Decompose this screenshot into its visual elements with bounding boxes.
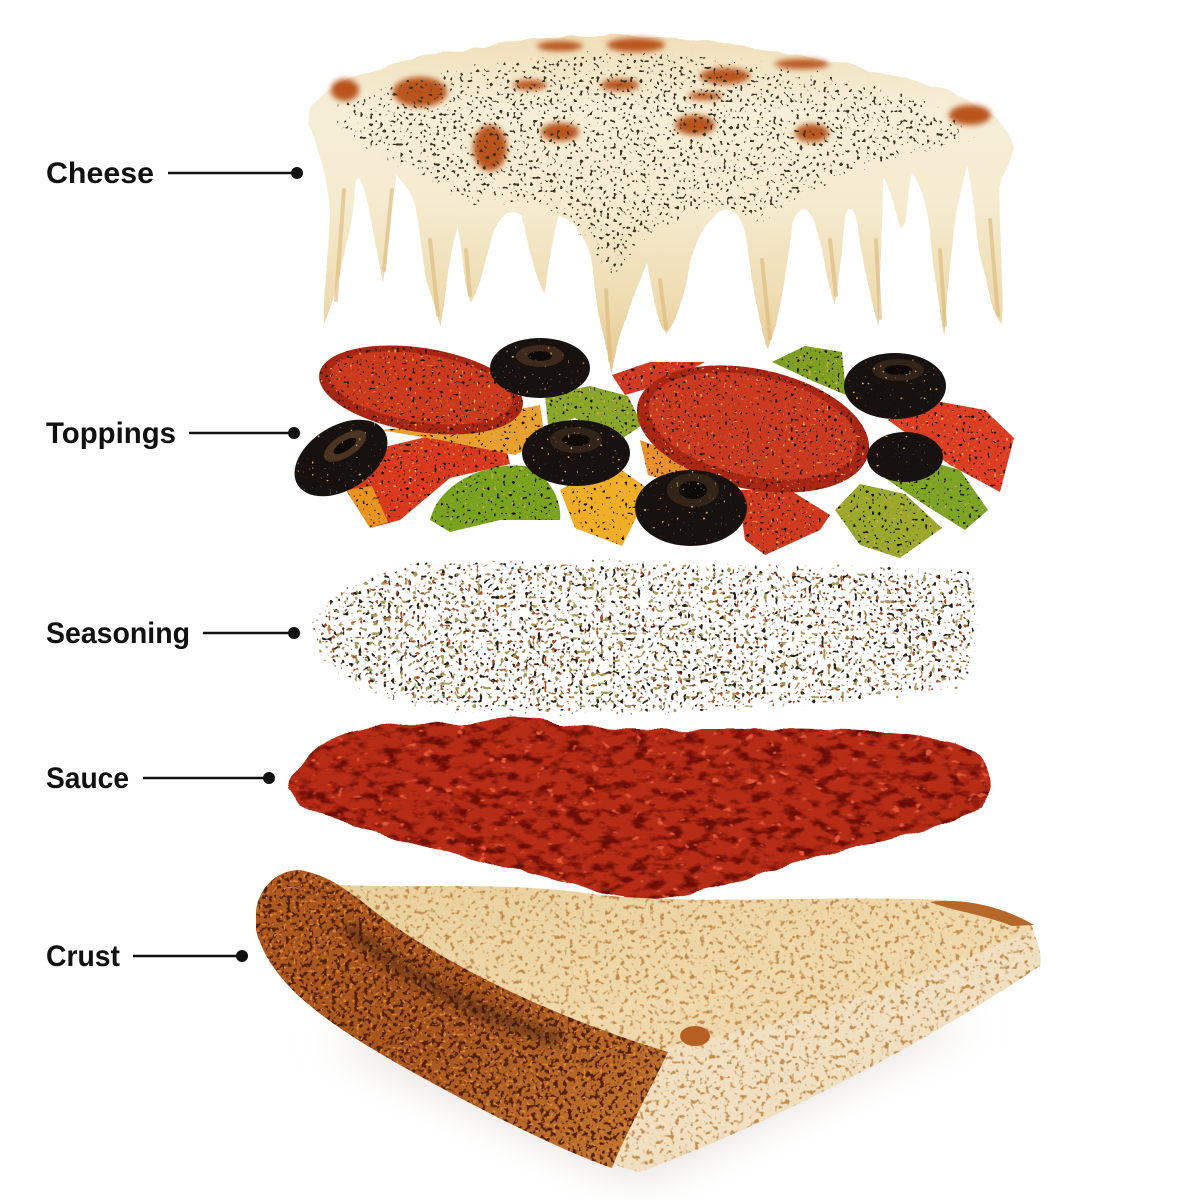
pepper flecks on cheese	[320, 40, 1000, 320]
label: seasoning	[46, 617, 300, 650]
crust char	[345, 925, 560, 1040]
label: toppings	[46, 417, 300, 450]
peppers and pepperoni	[313, 332, 1014, 558]
label: sauce	[46, 762, 275, 795]
black olives	[281, 338, 946, 546]
label: crust: Crust	[46, 940, 120, 973]
label: sauce: Sauce	[46, 762, 129, 795]
cheese layer	[307, 35, 1016, 372]
crust layer	[256, 870, 1041, 1180]
label: crust	[46, 940, 248, 973]
bell peppers	[346, 346, 1014, 558]
sauce body	[288, 718, 990, 900]
speck field dark	[298, 550, 987, 725]
shadow	[320, 1020, 980, 1180]
speck field olive	[298, 550, 987, 725]
toasted spot	[680, 1026, 710, 1046]
far crust edge	[930, 901, 1034, 926]
label: cheese: Cheese	[46, 157, 154, 190]
crumb cut face	[600, 930, 1041, 1172]
seasoning layer	[298, 550, 987, 725]
golden strand shading	[336, 190, 998, 360]
crumb top surface	[320, 884, 1040, 1052]
browned spots	[331, 38, 991, 171]
toppings layer	[281, 332, 1014, 558]
label: seasoning: Seasoning	[46, 617, 190, 650]
sauce layer	[288, 718, 990, 900]
baked crust edge	[256, 870, 668, 1168]
speck field red	[298, 550, 987, 725]
label: cheese	[46, 157, 303, 190]
pepperoni slices	[313, 332, 881, 512]
melted cheese body with drips	[307, 35, 1016, 372]
label: toppings: Toppings	[46, 417, 176, 450]
